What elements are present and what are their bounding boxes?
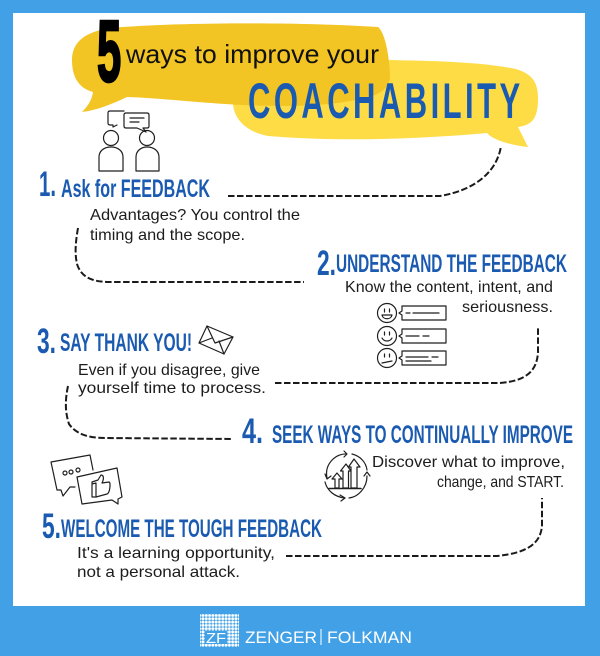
step 3 [37,322,266,397]
step 2 [317,244,567,316]
heading: coachability: COACHABILITY [248,72,520,129]
number 4: 4. [242,412,263,451]
footer logo [200,614,412,647]
connector 2 [76,228,304,282]
text 5: It's a learning opportunity, [77,545,275,562]
connector 5 [286,498,542,556]
connector 1 [228,146,501,196]
heading 3: SAY THANK YOU! [60,329,192,357]
speech bubble: dark yellow [72,23,390,112]
text 4: Discover what to improve, [372,454,565,471]
text 5 line 2: not a personal attack. [77,564,240,581]
number 5: 5. [42,507,61,546]
text 1 line 2: timing and the scope. [90,227,245,244]
title banner [72,3,538,147]
heading 5: WELCOME THE TOUGH FEEDBACK [61,515,322,543]
logo mark: ZF [206,630,226,647]
text 2 line 2: seriousness. [462,299,553,316]
number 2: 2. [317,244,336,283]
numeral 5: 5 [97,3,121,100]
number 1: 1. [39,165,56,204]
logo mark [200,614,239,647]
heading line: ways to improve your [125,39,379,69]
step 5 [42,507,322,581]
icon: two people talking [99,111,159,171]
connector 3 [275,327,538,383]
icon: growth arrows in cycle [325,451,370,501]
wordmark divider [320,629,322,645]
icon: speech bubbles with thumbs up [51,455,122,504]
text 1: Advantages? You control the [90,207,300,224]
text 2: Know the content, intent, and [345,279,553,296]
heading 1: Ask for FEEDBACK [61,175,210,203]
text 3 line 2: yourself time to process. [78,380,266,397]
wordmark: ZENGER [245,628,317,647]
wordmark 2: FOLKMAN [327,628,412,647]
icon: faces with feedback [378,304,446,368]
icon: envelope [199,326,233,354]
text 3: Even if you disagree, give [78,362,260,379]
step 4 [242,412,573,491]
speech bubble: light yellow [233,60,538,147]
text 4 line 2: change, and START. [437,474,564,491]
connector 4 [66,386,233,439]
step 1 [39,165,300,244]
number 3: 3. [37,322,56,361]
